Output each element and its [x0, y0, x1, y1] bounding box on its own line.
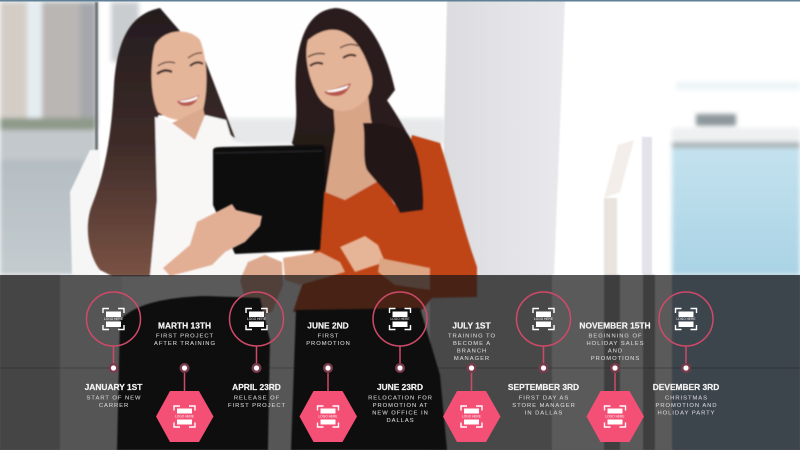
timeline: horizontal line	[0, 368, 800, 369]
icon: logo mark: LOGO HERE	[606, 415, 624, 419]
dark translucent timeline panel	[0, 275, 800, 450]
icon: logo mark: LOGO HERE	[104, 317, 123, 321]
milestone: Devember 3rd: CHRISTMAS	[665, 396, 708, 402]
milestone: January 1st: JANUARY 1ST	[85, 382, 143, 392]
milestone: January 1st	[85, 292, 143, 409]
timeline milestones	[85, 292, 719, 442]
milestone: Marth 13th: MARTH 13TH	[158, 320, 211, 330]
milestone: November 15th: HOLIDAY SALES	[587, 341, 644, 347]
milestone: June 23rd: JUNE 23RD	[377, 382, 423, 392]
icon: logo mark: LOGO HERE	[391, 317, 409, 321]
milestone: Marth 13th	[154, 320, 216, 442]
top edge strip	[0, 0, 800, 2]
icon: logo mark: LOGO HERE	[462, 415, 481, 419]
milestone: November 15th: AND	[608, 348, 623, 354]
milestone: April 23rd	[228, 292, 286, 409]
milestone: November 15th	[579, 320, 651, 442]
photo: woman on the left	[88, 8, 268, 276]
milestone: July 1st: TRAINING TO	[448, 334, 496, 340]
milestone: July 1st	[443, 320, 500, 442]
milestone: June 23rd: RELOCATION FOR	[368, 396, 433, 402]
milestone: September 3rd: STORE MANAGER	[512, 403, 576, 409]
milestone: January 1st: START OF NEW	[87, 396, 141, 402]
milestone: Devember 3rd: DEVEMBER 3RD	[653, 382, 719, 392]
milestone: November 15th: NOVEMBER 15TH	[579, 320, 651, 330]
milestone: November 15th: BEGINNING OF	[589, 334, 642, 340]
milestone: Devember 3rd: PROMOTION AND	[655, 403, 718, 409]
icon: logo mark: LOGO HERE	[677, 317, 695, 321]
milestone: April 23rd: RELEASE OF	[234, 396, 280, 402]
milestone: July 1st: BRANCH	[457, 348, 487, 354]
milestone: April 23rd: FIRST PROJECT	[228, 403, 286, 409]
milestone: July 1st: JULY 1ST	[452, 320, 491, 330]
milestone: September 3rd: FIRST DAY AS	[519, 396, 569, 402]
milestone: April 23rd: APRIL 23RD	[232, 382, 281, 392]
milestone: June 23rd	[368, 292, 433, 424]
milestone: June 2nd: PROMOTION	[306, 341, 351, 347]
milestone: Marth 13th: FIRST PROJECT	[156, 334, 214, 340]
icon: logo mark: LOGO HERE	[175, 415, 194, 419]
icon: logo mark: LOGO HERE	[319, 415, 337, 419]
milestone: November 15th: PROMOTIONS	[591, 356, 640, 362]
milestone: January 1st: CARRER	[99, 403, 129, 409]
milestone: July 1st: BECOME A	[453, 341, 491, 347]
background tones seen through the panel	[0, 275, 800, 450]
milestone: June 23rd: PROMOTION AT	[373, 403, 428, 409]
milestone: June 23rd: DALLAS	[386, 418, 415, 424]
milestone: September 3rd: IN DALLAS	[525, 410, 563, 416]
photo: dark skirts below the panel line	[117, 296, 447, 450]
icon: logo mark: LOGO HERE	[534, 317, 553, 321]
milestone: July 1st: MANAGER	[454, 356, 490, 362]
photo: tablet folder	[213, 145, 325, 254]
milestone: Marth 13th: AFTER TRAINING	[154, 341, 216, 347]
milestone: September 3rd	[508, 292, 579, 416]
milestone: June 2nd: JUNE 2ND	[307, 320, 349, 330]
milestone: Devember 3rd	[653, 292, 719, 416]
milestone: June 2nd: FIRST	[318, 334, 339, 340]
photo: woman on the right	[292, 8, 477, 312]
milestone: September 3rd: SEPTEMBER 3RD	[508, 382, 579, 392]
photo: hands holding the tablet	[163, 204, 430, 318]
milestone: Devember 3rd: HOLIDAY PARTY	[657, 410, 716, 416]
milestone: June 23rd: NEW OFFICE IN	[372, 410, 429, 416]
milestone: June 2nd	[300, 320, 357, 442]
icon: logo mark: LOGO HERE	[247, 317, 266, 321]
